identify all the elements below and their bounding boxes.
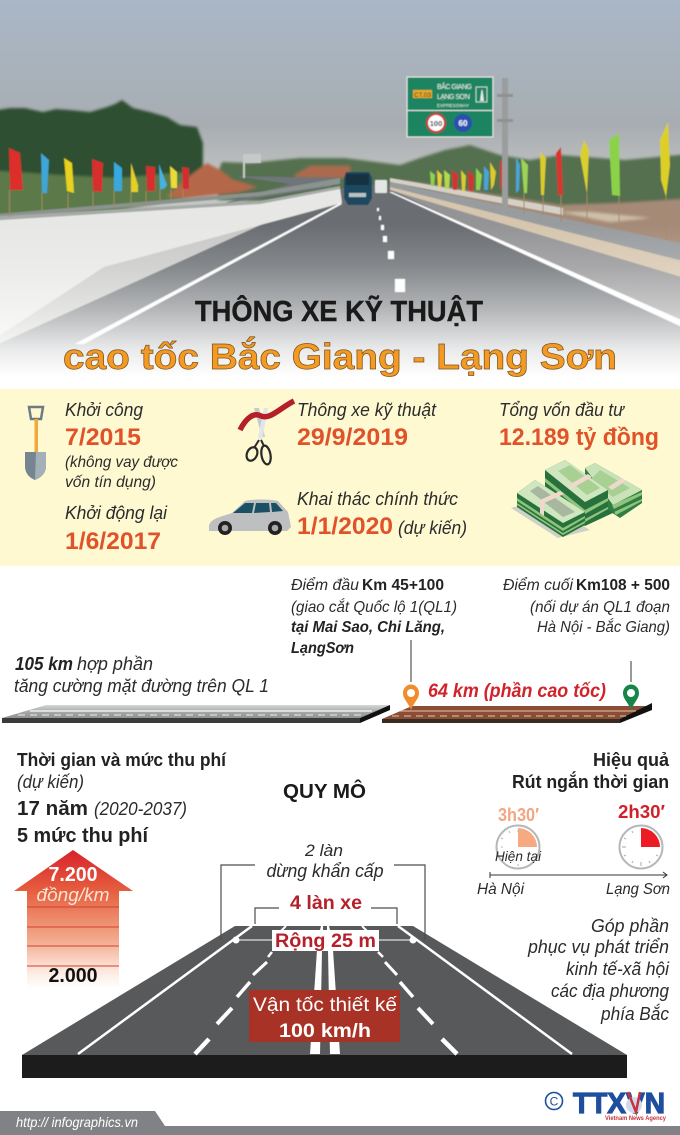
icon: green map pin (623, 684, 639, 710)
text: start point: (giao cắt Quốc lộ 1(QL1) (291, 597, 457, 616)
back right stack (585, 463, 642, 518)
text: start point (291, 576, 457, 657)
green road sign (407, 77, 493, 137)
text: start point: LạngSơn (291, 640, 354, 657)
road surface (0, 183, 680, 395)
heading: scale: QUY MÔ (283, 779, 366, 803)
title: cao tốc Bắc Giang - Lạng Sơn (63, 335, 617, 377)
label: emergency lanes (266, 841, 384, 881)
brackets: emergency lanes (221, 865, 425, 940)
text: start point: tại Mai Sao, Chi Lăng, (291, 619, 445, 636)
dashed lane lines (195, 926, 457, 1054)
labels: route ends: Hà Nội (477, 881, 524, 898)
green road sign: EXPRESSWAY (437, 103, 469, 108)
text: end point: Hà Nội - Bắc Giang) (537, 617, 670, 636)
text: technical opening: Thông xe kỹ thuật (297, 400, 437, 420)
chart: toll rate arrow (14, 850, 133, 988)
solid edge lines (78, 926, 572, 1054)
text: start of construction (65, 400, 178, 555)
text: toll time and rates: 17 năm (17, 798, 88, 820)
text: regional development (527, 916, 670, 1024)
label: 4 lanes: 4 làn xe (290, 893, 362, 914)
speed box: Vận tốc thiết kế (253, 995, 397, 1016)
clock: current 3h30 (495, 805, 542, 868)
grey road strip: 105 km (2, 705, 390, 723)
text: start of construction: Khởi công (65, 400, 143, 420)
text: end point: Km108 + 500 (576, 577, 670, 594)
text: total investment: Tổng vốn đầu tư (499, 400, 626, 420)
title: THÔNG XE KỸ THUẬT (195, 294, 483, 328)
arrow: Hanoi to Lang Son (490, 872, 667, 878)
label: 64 km: 64 km (phần cao tốc) (428, 681, 606, 702)
bus and van (344, 172, 372, 205)
text: technical opening (297, 400, 437, 451)
far curve road (222, 176, 340, 204)
title (63, 294, 617, 377)
text: start point: Km 45+100 (362, 577, 444, 594)
clock: future 2h30: 2h30′ (618, 802, 665, 822)
speed box (249, 990, 400, 1042)
text: end point (503, 576, 670, 636)
text: start of construction: (không vay được (65, 454, 178, 471)
icon: scissors cutting ribbon (240, 401, 294, 465)
text: official operation (297, 489, 467, 540)
green road sign: LẠNG SƠN (437, 94, 470, 101)
photo: expressway with flags and sign (0, 0, 680, 395)
icon: car (209, 500, 291, 535)
end pin line (630, 661, 632, 682)
text: total investment (499, 400, 659, 451)
icon: shovel (25, 407, 46, 480)
brown road strip: 64 km (382, 703, 652, 723)
logo: TTXVN: Vietnam News Agency (605, 1115, 666, 1122)
road cross-section diagram (22, 926, 627, 1078)
text: toll time and rates: (dự kiến) (17, 772, 84, 792)
guard rail (390, 182, 680, 264)
icon: stacks of money (511, 460, 642, 538)
text: regional development: phía Bắc (600, 1004, 669, 1024)
labels: route ends (477, 881, 670, 898)
green road sign: 60 (459, 119, 468, 128)
text: total investment: 12.189 tỷ đồng (499, 424, 659, 451)
white barrier (0, 188, 342, 345)
text: regional development: Góp phần (591, 916, 669, 936)
label: emergency lanes: 2 làn (304, 841, 343, 860)
labels: route ends: Lạng Sơn (606, 881, 670, 898)
chart: toll rate arrow: 7.200 (48, 864, 98, 886)
sign pole (502, 78, 508, 214)
text: start of construction: Khởi động lại (65, 503, 168, 523)
white fade into title (0, 225, 680, 390)
clock: future 2h30 (618, 802, 665, 868)
footer bar: http:// infographics.vn (16, 1114, 138, 1130)
green road sign: BẮC GIANG (437, 82, 472, 91)
panel: key dates and investment (0, 389, 680, 566)
road markings (75, 192, 680, 344)
green road sign: CT.03 (414, 92, 431, 99)
green road sign: 100 (430, 119, 442, 128)
text: 105 km upgrade: 105 km (15, 654, 73, 674)
icon: orange map pin (403, 684, 419, 710)
shoulder (390, 183, 680, 333)
road front edge (22, 1055, 627, 1078)
text: end point: (nối dự án QL1 đoạn (530, 599, 670, 616)
flag poles (10, 189, 666, 240)
width label: Rộng 25 m (275, 931, 376, 952)
centre double lines (310, 950, 322, 1054)
text: 105 km upgrade: tăng cường mặt đường trên QL 1 (14, 676, 269, 696)
text: start of construction: vốn tín dụng) (65, 474, 156, 491)
label: emergency lanes: dừng khẩn cấp (266, 861, 384, 881)
clock: current 3h30: 3h30′ (498, 805, 539, 825)
text: official operation: (dự kiến) (398, 518, 467, 538)
chart: toll rate arrow: 2.000 (48, 965, 98, 987)
middle stack (545, 460, 615, 526)
heading: efficiency: Rút ngắn thời gian (512, 771, 669, 792)
chart: toll rate arrow: đồng/km (36, 885, 110, 905)
text: toll time and rates (17, 750, 227, 847)
text: official operation: 1/1/2020 (297, 513, 393, 540)
width label (232, 930, 416, 952)
start pin line (410, 640, 412, 682)
text: start point: Điểm đầu (291, 576, 359, 594)
text: 105 km upgrade: hợp phần (77, 654, 153, 674)
text: regional development: phục vụ phát triển (527, 937, 669, 957)
text: start of construction: 1/6/2017 (65, 528, 161, 555)
front stack (517, 480, 585, 537)
brackets: 4 lanes (255, 908, 397, 924)
text: start of construction: 7/2015 (65, 424, 141, 451)
logo: TTXVN: TTXVN (573, 1088, 665, 1120)
text: technical opening: 29/9/2019 (297, 424, 408, 451)
road surface (22, 926, 627, 1055)
text: toll time and rates: (2020-2037) (94, 799, 187, 819)
guard rail concrete footing (390, 186, 680, 281)
speed box: 100 km/h (279, 1021, 371, 1042)
text: toll time and rates: Thời gian và mức thu phí (17, 750, 227, 770)
logo: TTXVN: C (550, 1094, 559, 1108)
text: end point: Điểm cuối (503, 576, 573, 594)
right flags (660, 122, 670, 197)
clock: current 3h30: Hiện tại (495, 848, 542, 864)
text: 105 km upgrade (14, 654, 269, 696)
guard rail behind the white barrier (0, 178, 340, 219)
heading: efficiency (512, 750, 670, 792)
heading: efficiency: Hiệu quả (593, 750, 670, 770)
text: regional development: các địa phương (551, 981, 669, 1001)
text: regional development: kinh tế-xã hội (566, 959, 670, 979)
vegetation and earth (0, 100, 680, 250)
text: official operation: Khai thác chính thức (297, 489, 458, 509)
footer bar (0, 1111, 680, 1135)
left flags (9, 148, 23, 190)
white fence along right side (390, 178, 563, 215)
text: toll time and rates: 5 mức thu phí (17, 825, 149, 847)
